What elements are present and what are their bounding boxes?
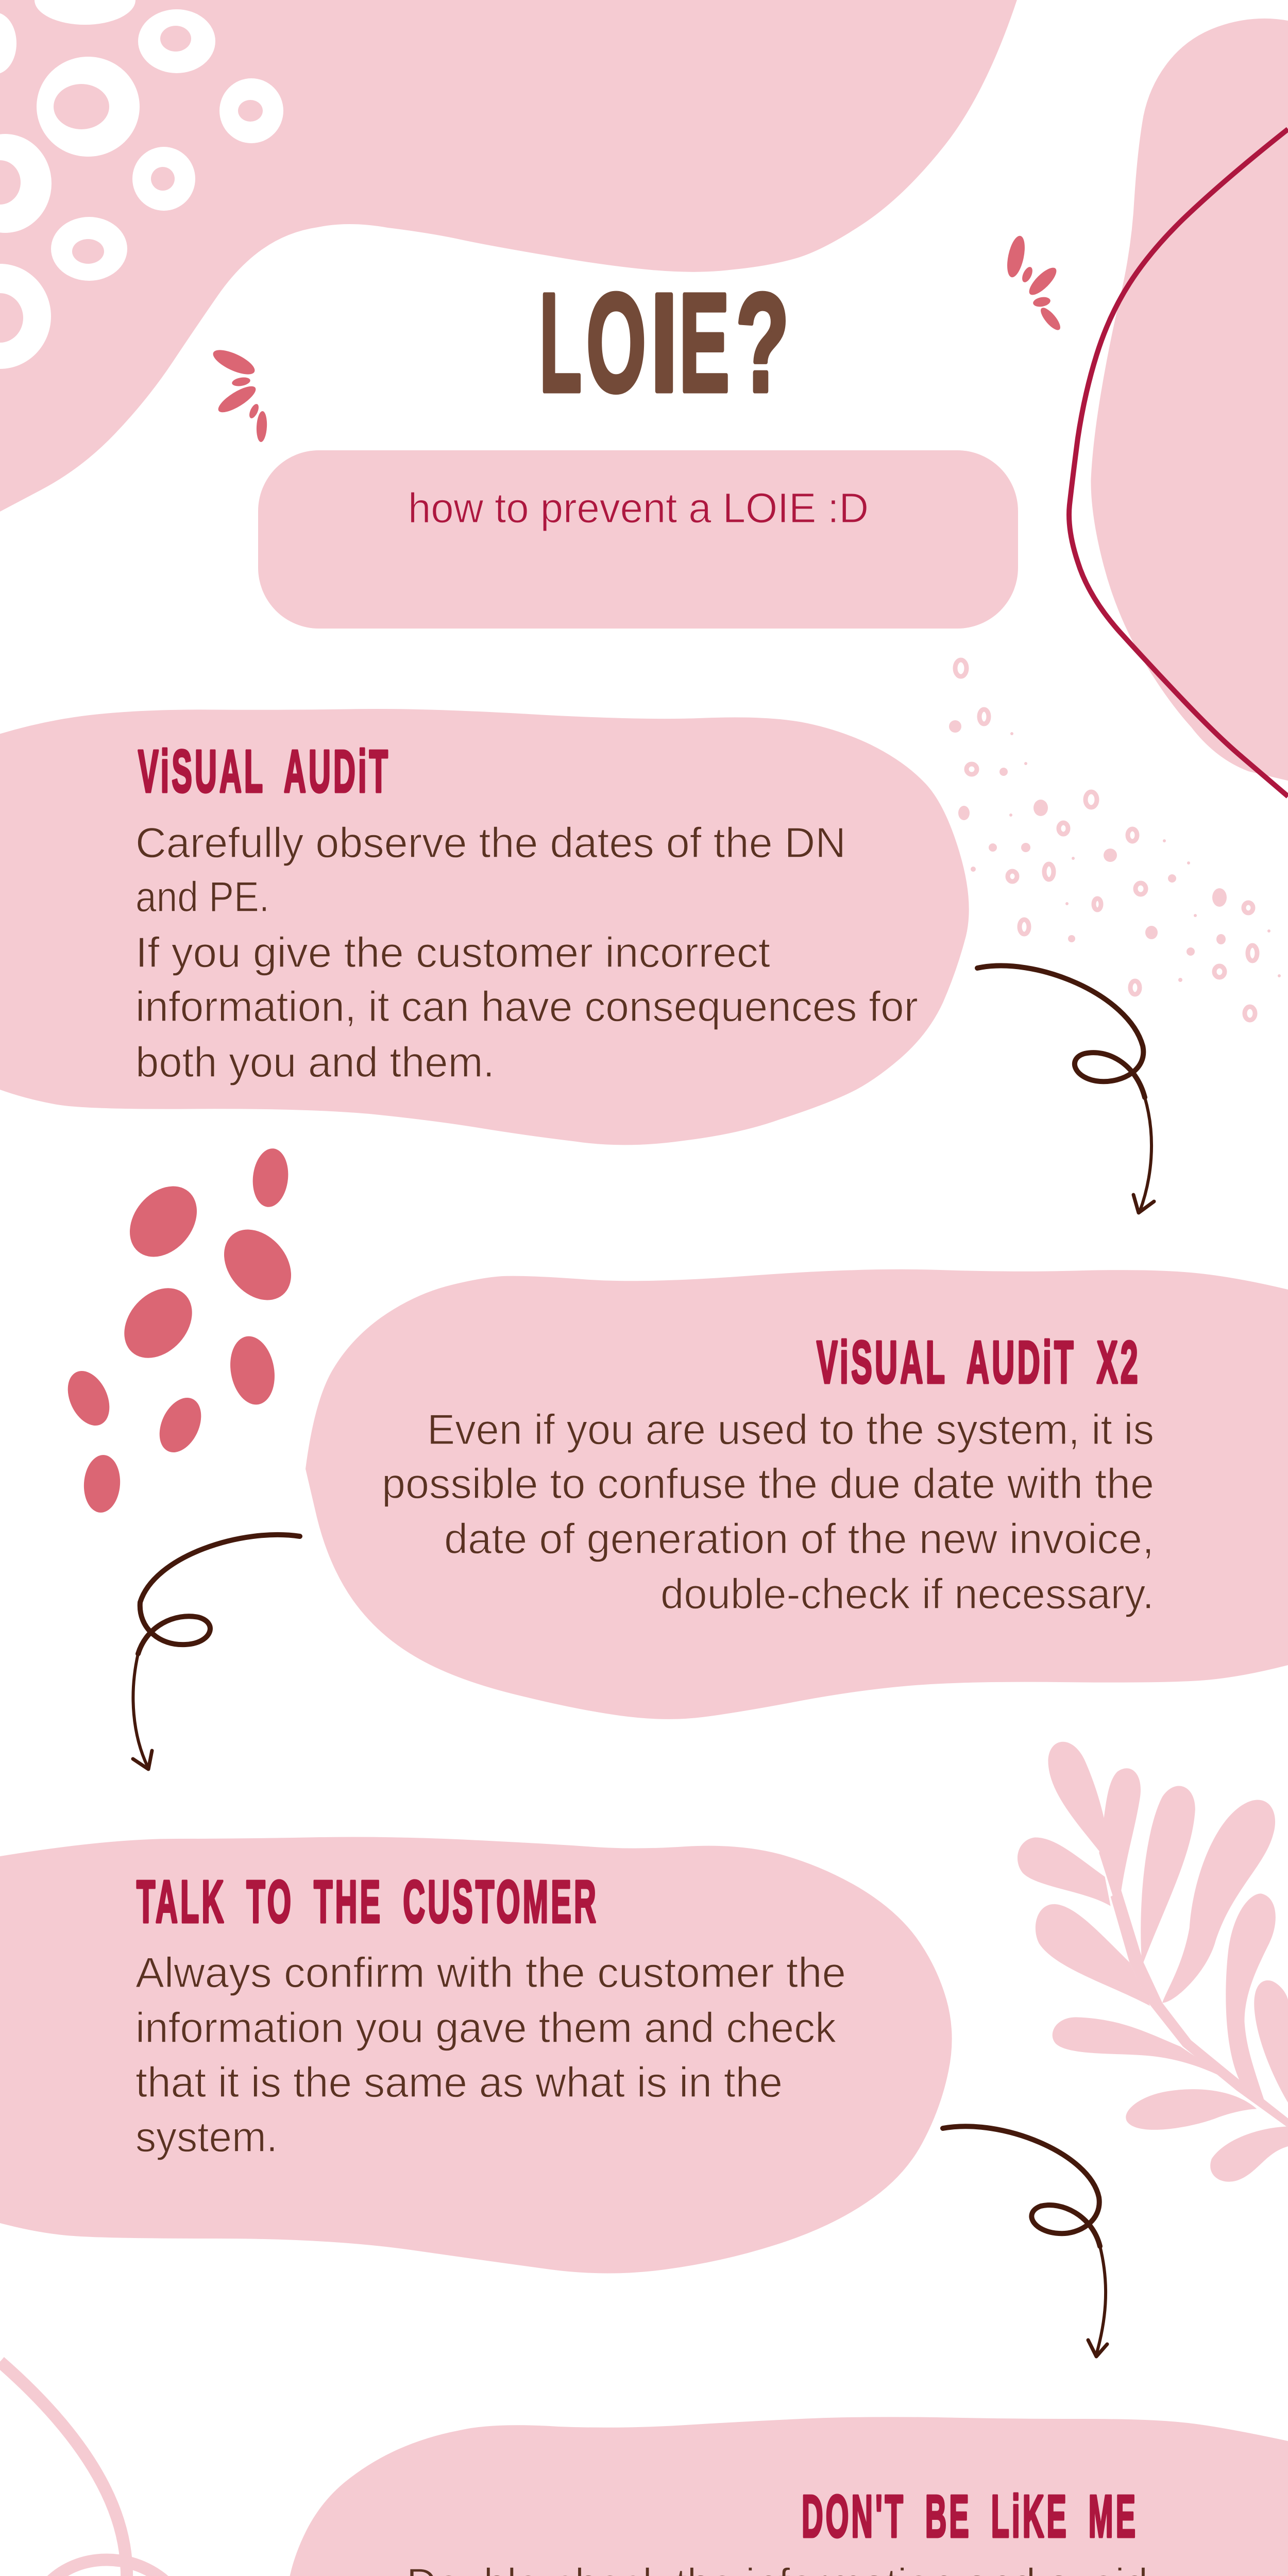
body text — [382, 1405, 1154, 1618]
body text: double-check if necessary. — [660, 1570, 1154, 1618]
accent dashes: right of title — [1004, 234, 1063, 333]
title — [539, 264, 789, 421]
panel shape — [284, 2417, 1288, 2576]
body text: information you gave them and check — [135, 2004, 836, 2052]
coral bean shapes — [60, 1147, 305, 1514]
title: ? — [736, 264, 789, 421]
white ring pattern — [0, 0, 283, 369]
body text: Carefully observe the dates of the DN — [135, 819, 846, 867]
panel: visual audit x2 — [306, 1269, 1288, 1719]
body text: If you give the customer incorrect — [135, 928, 770, 976]
pink swirl line — [0, 2362, 208, 2576]
body text: possible to confuse the due date with the — [382, 1460, 1154, 1507]
body text: Even if you are used to the system, it is — [427, 1405, 1154, 1453]
title: E — [679, 264, 730, 421]
panel shape — [306, 1269, 1288, 1719]
speckle pattern — [949, 660, 1281, 1020]
body text: and PE. — [135, 873, 269, 921]
arrow: x2 to talk to the customer — [133, 1535, 300, 1769]
panel: visual audit — [0, 709, 969, 1145]
title: O — [586, 264, 646, 421]
title: L — [539, 264, 582, 421]
accent dashes: left of title — [210, 345, 268, 442]
subtitle box — [258, 450, 1018, 629]
body text: information, it can have consequences for — [135, 982, 918, 1030]
body text — [135, 819, 918, 1086]
body text: Always confirm with the customer the — [135, 1948, 846, 1996]
background blob: top right — [1091, 19, 1288, 781]
panel shape — [0, 1837, 952, 2273]
body text: date of generation of the new invoice, — [444, 1515, 1154, 1563]
arrow: visual audit to x2 — [977, 965, 1154, 1213]
background blob: top left — [0, 0, 1017, 512]
body text: that it is the same as what is in the — [135, 2058, 783, 2106]
body text: both you and them. — [135, 1038, 495, 1086]
panel: talk to the customer — [0, 1837, 952, 2273]
subtitle panel — [258, 450, 1018, 629]
crimson outline curve — [1069, 129, 1288, 796]
panel: don't be like me — [284, 2417, 1288, 2576]
subtitle text: how to prevent a LOIE :D — [408, 485, 869, 532]
arrow: talk to the customer to don't be like me — [943, 2126, 1107, 2357]
panel shape — [0, 709, 969, 1145]
heading: ViSUAL AUDiT — [138, 738, 391, 805]
body text: system. — [135, 2113, 278, 2161]
leaf illustration — [1018, 1742, 1288, 2182]
body text — [135, 1948, 846, 2161]
heading: TALK TO THE CUSTOMER — [137, 1868, 599, 1935]
title: I — [650, 264, 678, 421]
